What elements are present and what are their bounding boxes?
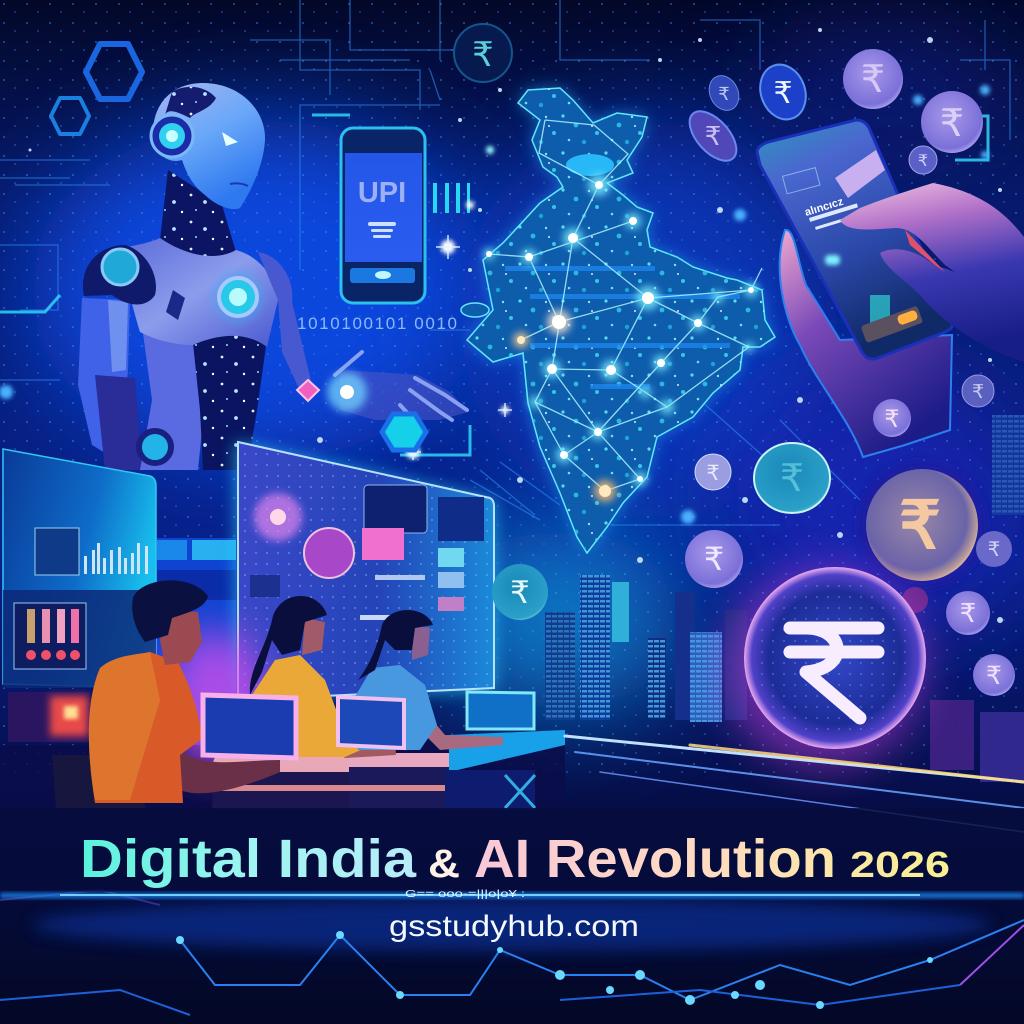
map data streaks: [505, 266, 740, 389]
left dashboard screen: [3, 449, 236, 773]
coin: ₹: [988, 539, 1000, 561]
island: [461, 303, 489, 317]
coin: [976, 531, 1012, 567]
title: [80, 829, 950, 889]
icon: top rupee coin: ₹: [472, 36, 494, 74]
magenta glow behind students: [165, 630, 265, 770]
coin: ₹: [960, 598, 976, 628]
title: AI Revolution: [474, 829, 836, 889]
robot eye: [222, 132, 238, 146]
icon: pink diamond: [297, 380, 319, 401]
coin: ₹: [899, 488, 941, 562]
hands holding phone: [757, 120, 1024, 457]
pink emblem: [304, 528, 354, 578]
map glowing nodes: [483, 174, 758, 502]
hair: [250, 596, 327, 695]
coin: [946, 591, 990, 635]
binary text: 1010100101 0010: [297, 314, 457, 333]
website label: gsstudyhub.com: [389, 910, 639, 943]
coin: ₹: [986, 662, 1002, 690]
UPI phone: [341, 128, 425, 303]
student: yellow shirt: [250, 596, 396, 758]
coin: [753, 58, 813, 126]
bar chart: [84, 543, 148, 574]
coin: ₹: [972, 382, 984, 403]
coin: [973, 654, 1015, 696]
coin: [909, 146, 937, 174]
coin: ₹: [884, 406, 900, 433]
arm: [420, 705, 503, 750]
face: [160, 610, 202, 665]
coin: [695, 454, 731, 490]
arm: [315, 705, 396, 758]
big rupee coin: [725, 567, 926, 768]
robot ear ring: [151, 115, 193, 157]
star glints: [405, 235, 512, 460]
robot hand: [327, 352, 468, 432]
title band: [0, 808, 1024, 900]
arm: [178, 748, 280, 793]
left hand: [780, 230, 952, 457]
hair: [358, 610, 433, 680]
robot arm left: [78, 298, 130, 462]
coin: ₹: [940, 103, 964, 145]
coin: [962, 375, 994, 407]
rupee coins: [681, 49, 1015, 696]
phone screen text: alıncıcz: [803, 196, 845, 219]
robot left shoulder: [83, 245, 156, 304]
cyan lake: [566, 154, 614, 176]
robot lower torso: [140, 333, 204, 470]
students at laptops: [0, 580, 565, 810]
coin: ₹: [705, 121, 721, 151]
glowing divider: [0, 893, 1024, 898]
icon: hexagon outlines top left: [51, 44, 142, 134]
right hand: [840, 183, 1024, 362]
robot head: [153, 83, 265, 209]
robot mouth: [230, 183, 248, 186]
network lines: [489, 120, 762, 491]
robot chest core: [212, 271, 264, 323]
title: 2026: [850, 844, 950, 885]
coin: ₹: [780, 458, 804, 500]
coin: ₹: [718, 84, 730, 104]
coin: ₹: [861, 59, 885, 101]
student: orange shirt: [89, 580, 280, 803]
coin: [754, 443, 830, 513]
icon: top rupee coin: [454, 24, 512, 82]
coin: ₹: [706, 462, 720, 485]
robot figure: [78, 83, 468, 470]
icon: cyan hexagon: [382, 414, 426, 450]
flower glow: [254, 493, 302, 541]
face: [412, 625, 430, 660]
upi logo: [368, 222, 396, 238]
coin: [902, 587, 928, 613]
smartphone: [757, 120, 953, 359]
coin: ₹: [918, 153, 928, 170]
coin: [681, 103, 745, 169]
road light streaks: [565, 736, 1024, 832]
robot chest plate: [117, 238, 278, 347]
hair: [132, 580, 208, 642]
phone pay button: [861, 306, 923, 343]
chair: [52, 755, 146, 808]
coin: [858, 461, 986, 589]
coin: [704, 71, 744, 115]
student: blue shirt: [353, 610, 503, 750]
coin: [685, 530, 743, 588]
title: Digital India: [80, 829, 417, 889]
teal coin: ₹: [510, 575, 530, 610]
face: [302, 618, 325, 655]
UPI phone: UPI: [358, 177, 406, 209]
teal coin: [492, 564, 548, 620]
robot core speckled: [193, 335, 266, 470]
lower panel with orange glow: [8, 692, 90, 742]
phone screen bars: [809, 203, 858, 230]
circuit lines footer: [0, 890, 1024, 1015]
central dashboard screen: [236, 442, 548, 700]
robot right shoulder and arm: [258, 252, 312, 395]
neon bars beside phone: [433, 183, 470, 213]
phone screen image: [835, 150, 885, 198]
coin: ₹: [704, 541, 724, 577]
dark lower floor: [0, 738, 565, 808]
coin: [843, 49, 903, 109]
desks: [209, 730, 565, 810]
city skyline: [545, 415, 1024, 782]
robot neck speckled: [160, 170, 236, 259]
colored bars panel: [14, 603, 86, 669]
coin: ₹: [773, 77, 793, 110]
title: &: [428, 842, 460, 886]
blue side panels: [157, 540, 236, 600]
tiny text above divider: G== ooo-=|||o|o¥ :: [405, 889, 525, 900]
India network map: [461, 88, 775, 553]
laptops: [203, 692, 534, 758]
coin: [873, 399, 911, 437]
coin: [921, 91, 983, 153]
